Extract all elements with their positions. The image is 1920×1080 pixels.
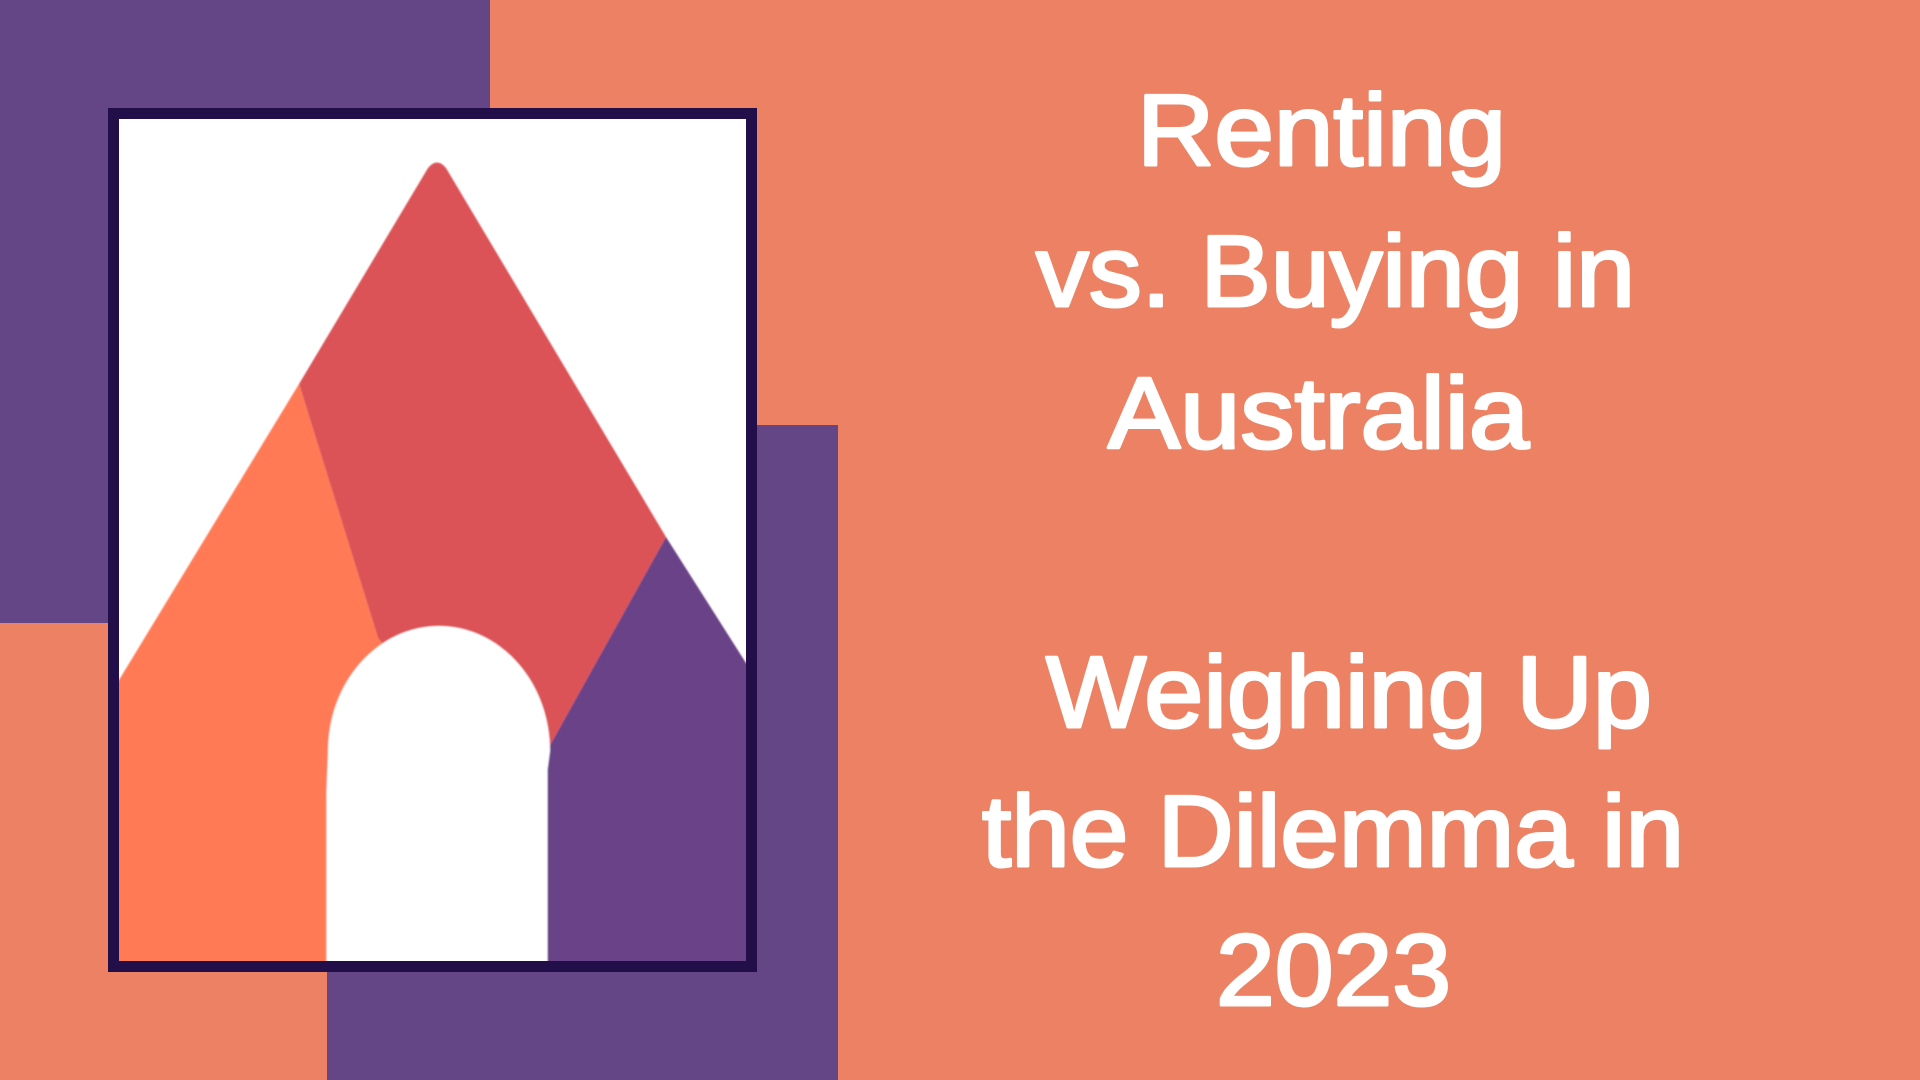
- icon: house logo: [105, 162, 760, 975]
- subtitle line 1: Weighing Up: [1046, 637, 1652, 749]
- wall: purple section: [546, 536, 746, 961]
- frame border: [108, 108, 757, 972]
- title line 3: Australia: [1108, 358, 1530, 470]
- logo frame: [105, 108, 760, 975]
- title line 1: Renting: [1137, 75, 1506, 187]
- title line 2: vs. Buying in: [1036, 216, 1635, 328]
- panel: purple block top left: [0, 0, 490, 623]
- panel: purple block bottom right: [327, 425, 838, 1080]
- wall: orange section: [119, 384, 383, 961]
- roof: red section: [299, 162, 666, 800]
- subtitle line 3: 2023: [1216, 915, 1451, 1027]
- frame white interior: [119, 119, 746, 961]
- door arch: [326, 626, 550, 975]
- heading: title: [982, 75, 1684, 1027]
- subtitle line 2: the Dilemma in: [982, 776, 1684, 888]
